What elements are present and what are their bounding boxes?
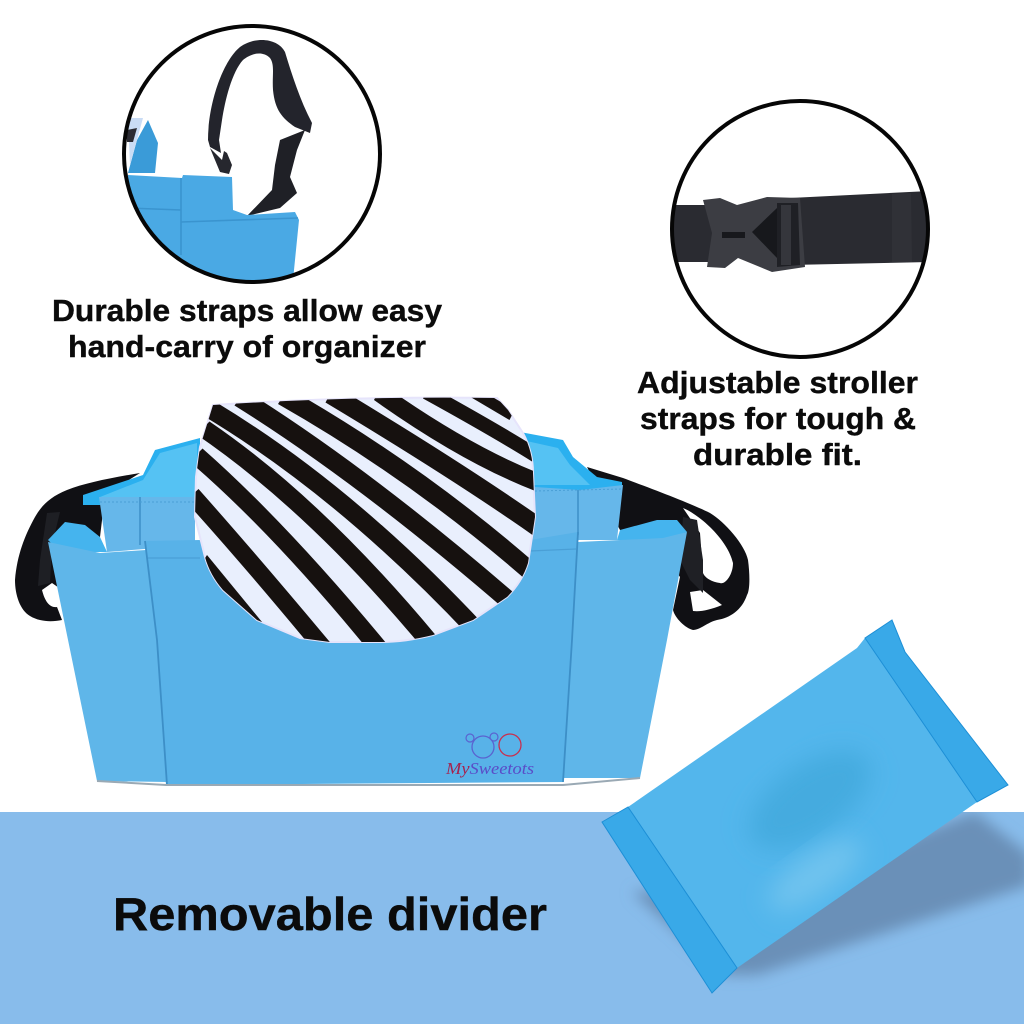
striped flap	[194, 396, 536, 643]
left pocket	[48, 542, 167, 782]
text: adjustable stroller straps	[637, 365, 918, 472]
logo: MySweetots: MySweetots	[445, 759, 534, 778]
text: adjustable stroller straps: straps for tough &	[640, 401, 916, 436]
left black strap	[15, 473, 140, 621]
divider top hem	[865, 620, 1008, 802]
inner lining with ruffles	[83, 432, 622, 505]
panel: blue footer band	[0, 812, 1024, 1024]
heading: durable straps: Durable straps allow easy	[52, 293, 443, 328]
divider bottom hem	[602, 807, 737, 993]
logo: MySweetots	[445, 733, 534, 778]
main front panel	[145, 532, 578, 785]
divider mottling	[754, 754, 866, 914]
heading: durable straps	[52, 293, 443, 364]
icon: carry strap loop	[208, 40, 312, 153]
right strap buckle	[680, 517, 703, 593]
right black strap	[587, 467, 749, 630]
upper pockets	[99, 485, 623, 552]
text: adjustable stroller straps: Adjustable stroller	[637, 365, 918, 400]
icon: side release buckle	[247, 130, 305, 216]
icon: small buckle	[210, 148, 232, 174]
left strap buckle	[38, 512, 60, 586]
bottom shadow	[97, 778, 640, 785]
heading: durable straps: hand-carry of organizer	[68, 329, 426, 364]
organizer blue body	[128, 175, 299, 280]
heading: removable divider: Removable divider	[113, 888, 547, 940]
product: removable divider	[602, 620, 1024, 993]
text: adjustable stroller straps: durable fit.	[693, 437, 862, 472]
divider pouch	[602, 620, 1008, 993]
callout circle: hand-carry strap	[124, 26, 380, 282]
left pocket lip lining	[48, 522, 107, 552]
callout circle: stroller strap	[670, 101, 930, 357]
icon: strap webbing	[670, 191, 930, 265]
product: stroller organizer bag	[15, 384, 749, 785]
divider shadow	[632, 812, 1024, 975]
icon: strap buckle	[703, 197, 805, 272]
right pocket	[562, 532, 687, 778]
right pocket lip lining	[617, 520, 687, 540]
